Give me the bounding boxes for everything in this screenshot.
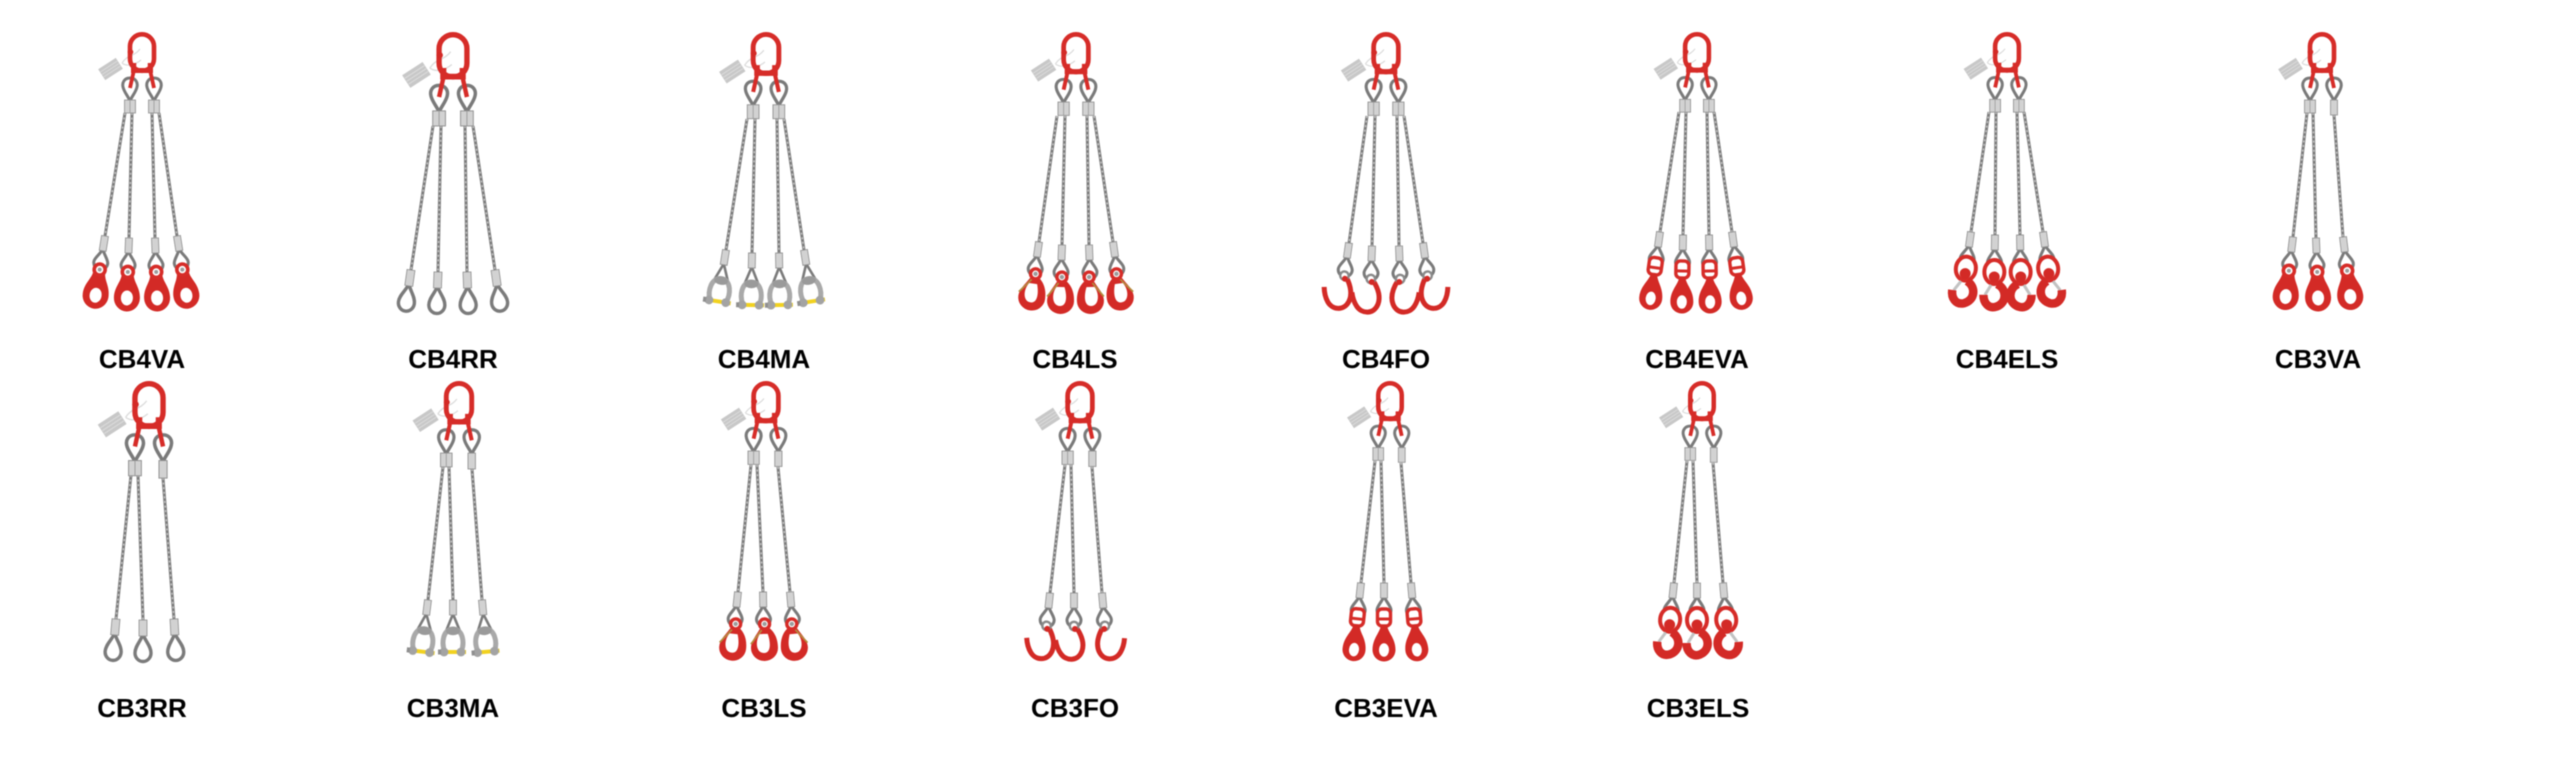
wire ropes	[428, 467, 482, 600]
master link and tag	[1964, 34, 2026, 112]
wire ropes	[726, 119, 804, 253]
sling: CB3FO	[1025, 383, 1126, 723]
wire ropes	[1039, 116, 1113, 245]
master link and tag	[1347, 383, 1409, 462]
wire ropes	[2293, 113, 2343, 238]
master link and tag	[719, 34, 787, 119]
lower shackles	[406, 598, 500, 658]
wire ropes	[1361, 461, 1411, 583]
label: CB4EVA	[1645, 344, 1749, 374]
wire ropes	[116, 475, 174, 620]
label: CB4MA	[718, 344, 810, 374]
label: CB4FO	[1342, 344, 1430, 374]
lower hooks	[2271, 235, 2365, 312]
master link and tag	[1654, 34, 1716, 112]
lower swivel hooks	[1638, 230, 1754, 314]
master link and tag	[1035, 383, 1100, 466]
lower hooks	[81, 234, 201, 312]
sling: CB4FO	[1321, 34, 1451, 374]
wire ropes	[738, 465, 790, 592]
sling: CB3RR	[97, 384, 187, 723]
label: CB4LS	[1032, 344, 1118, 374]
master link and tag	[721, 383, 786, 466]
label: CB3LS	[721, 693, 807, 723]
master link and tag	[98, 384, 172, 478]
label: CB3FO	[1031, 693, 1119, 723]
sling: CB4VA	[81, 34, 201, 374]
wire ropes	[411, 126, 495, 272]
sling: CB3EVA	[1334, 383, 1438, 723]
lower hooks	[1321, 240, 1451, 313]
master link and tag	[402, 35, 475, 126]
lower swivel hooks	[1656, 582, 1740, 656]
lower shackles	[702, 248, 826, 310]
master link and tag	[98, 34, 161, 113]
lower hooks	[1017, 240, 1135, 314]
wire ropes	[1660, 112, 1732, 235]
label: CB4ELS	[1956, 344, 2058, 374]
label: CB4VA	[99, 344, 185, 374]
sling: CB3ELS	[1647, 383, 1749, 723]
master link and tag	[1031, 34, 1096, 115]
lower eyes	[104, 618, 184, 662]
label: CB4RR	[408, 344, 498, 374]
master link and tag	[1341, 34, 1406, 115]
sling: CB4RR	[397, 35, 509, 374]
sling: CB4MA	[702, 34, 826, 374]
wire ropes	[105, 113, 177, 238]
sling: CB3VA	[2271, 34, 2365, 374]
label: CB3EVA	[1334, 693, 1438, 723]
label: CB3MA	[407, 693, 499, 723]
sling: CB4EVA	[1638, 34, 1754, 374]
lower hooks	[1025, 591, 1126, 660]
sling: CB3LS	[718, 383, 809, 723]
wire ropes	[1674, 461, 1723, 583]
sling: CB4LS	[1017, 34, 1135, 374]
master link and tag	[2278, 34, 2341, 115]
lower swivel hooks	[1341, 582, 1429, 662]
lower swivel hooks	[1951, 231, 2063, 307]
lower eyes	[397, 269, 509, 314]
label: CB3RR	[97, 693, 187, 723]
master link and tag	[413, 383, 479, 469]
wire ropes	[1971, 112, 2043, 235]
sling: CB4ELS	[1951, 34, 2063, 374]
label: CB3ELS	[1647, 693, 1749, 723]
wire ropes	[1349, 116, 1423, 246]
label: CB3VA	[2275, 344, 2361, 374]
sling: CB3MA	[406, 383, 500, 723]
lower hooks	[718, 591, 809, 662]
wire ropes	[1050, 465, 1102, 593]
master link and tag	[1659, 383, 1721, 462]
